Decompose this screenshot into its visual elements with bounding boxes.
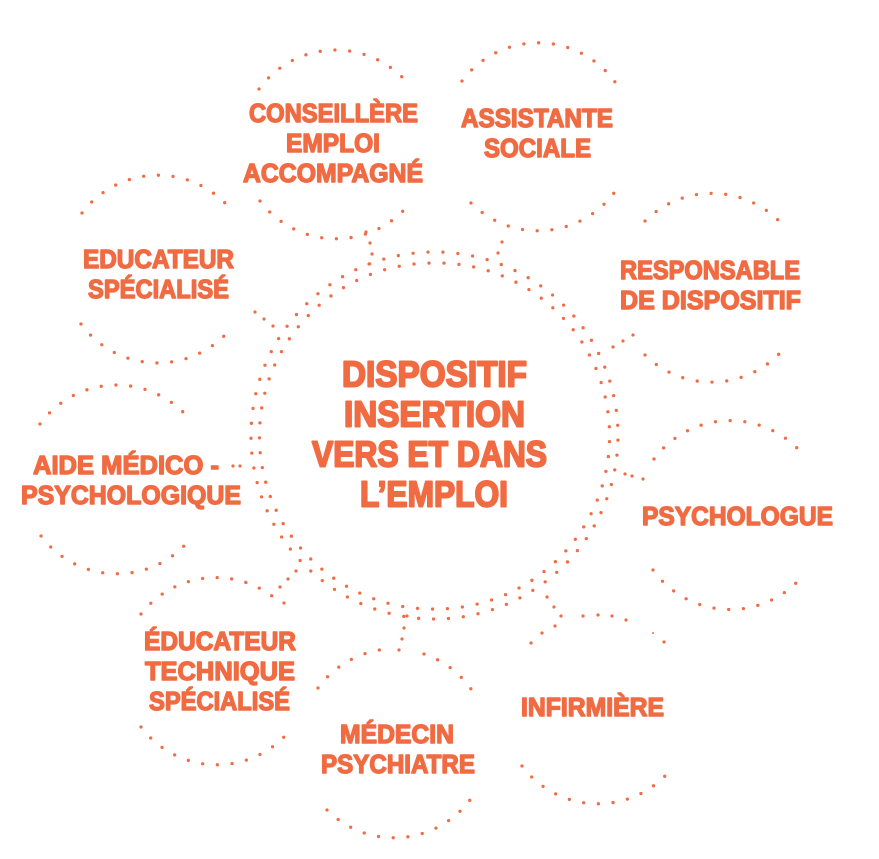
central title: INSERTION [344, 394, 525, 434]
node: éducateur technique spécialisé: TECHNIQUE [145, 658, 295, 686]
node: médecin psychiatre [318, 614, 475, 838]
node: conseillère emploi accompagné: CONSEILLÈRE [249, 99, 418, 128]
node: médecin psychiatre: PSYCHIATRE [321, 751, 475, 779]
central title [312, 354, 547, 514]
node: éducateur spécialisé: EDUCATEUR [83, 246, 234, 274]
node: éducateur spécialisé: SPÉCIALISÉ [88, 275, 229, 304]
node: conseillère emploi accompagné [243, 50, 423, 266]
central title: VERS ET DANS [312, 434, 547, 474]
node: assistante sociale [461, 43, 615, 255]
node: éducateur spécialisé [81, 175, 275, 363]
node: conseillère emploi accompagné: ACCOMPAGNÉ [243, 159, 423, 188]
central title: L’EMPLOI [360, 474, 508, 514]
node: aide médico-psychologique [21, 385, 242, 574]
node: conseillère emploi accompagné: EMPLOI [286, 130, 380, 158]
node: responsable de dispositif: RESPONSABLE [620, 257, 800, 285]
node: responsable de dispositif: DE DISPOSITIF [620, 287, 801, 315]
node: responsable de dispositif [611, 193, 801, 382]
node: assistante sociale: ASSISTANTE [461, 105, 613, 133]
node: psychologue [623, 421, 833, 610]
node: aide médico-psychologique: AIDE MÉDICO - [33, 451, 219, 480]
node: éducateur technique spécialisé: ÉDUCATEUR [144, 627, 296, 656]
node: infirmière [521, 595, 666, 804]
node: médecin psychiatre: MÉDECIN [340, 720, 454, 749]
node: psychologue: PSYCHOLOGUE [642, 503, 833, 531]
central double dotted ring [251, 252, 618, 619]
node: aide médico-psychologique: PSYCHOLOGIQUE [21, 482, 241, 510]
node: infirmière: INFIRMIÈRE [521, 693, 664, 722]
node: éducateur technique spécialisé: SPÉCIALISÉ [149, 687, 290, 716]
central title: DISPOSITIF [342, 354, 527, 394]
node: assistante sociale: SOCIALE [484, 135, 591, 163]
node: éducateur technique spécialisé [141, 569, 298, 765]
